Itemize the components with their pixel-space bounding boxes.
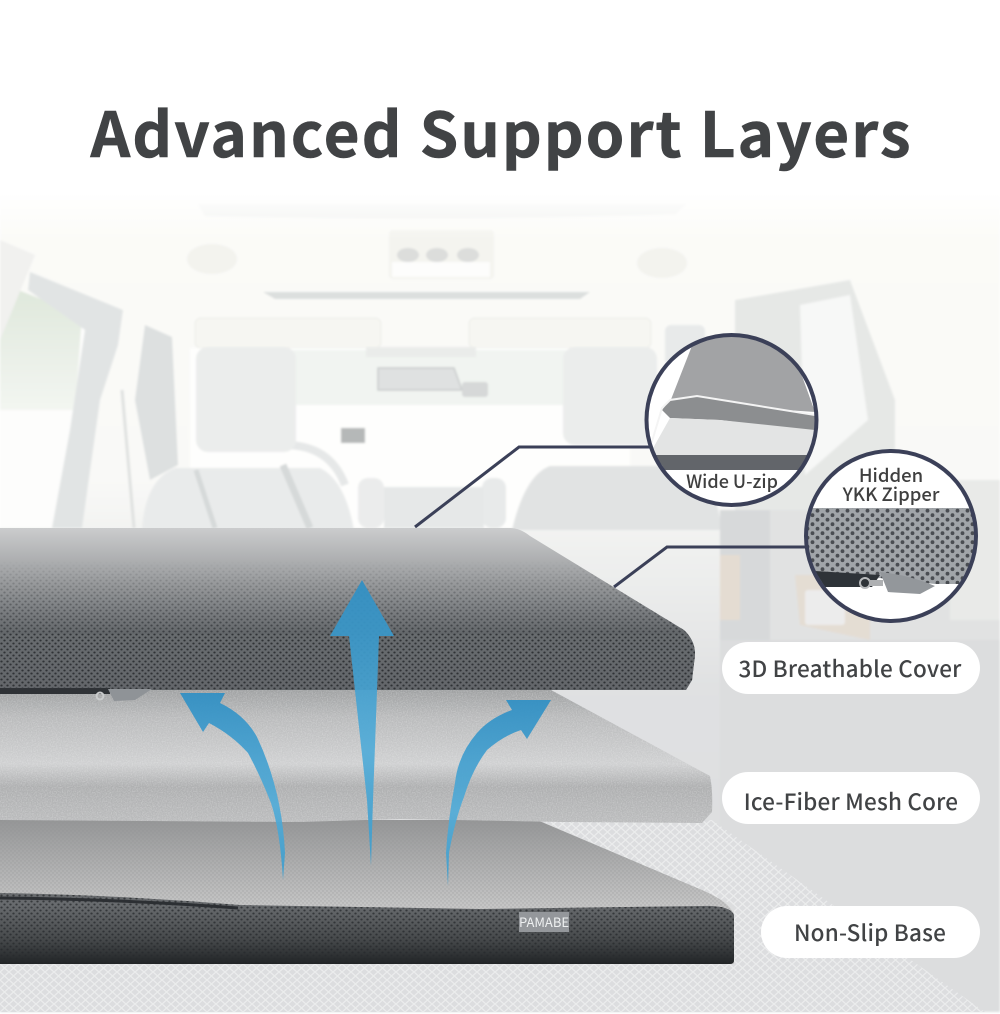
center console <box>358 478 384 528</box>
sunroof panel <box>198 204 686 219</box>
arrow: center <box>330 580 394 866</box>
right headrest <box>563 347 657 445</box>
layer: ice-fiber mesh core <box>0 690 712 823</box>
callout circle: hidden YKK zipper: Hidden <box>859 462 923 488</box>
right seat <box>512 466 722 530</box>
arrow: right <box>446 700 551 886</box>
dash phone <box>341 428 365 443</box>
seat belts <box>196 470 215 528</box>
distant trees <box>290 350 580 405</box>
callout circle: wide U-zip: Wide U-zip <box>686 468 778 494</box>
layer: non-slip base <box>0 820 734 964</box>
steering wheel <box>285 445 345 485</box>
layer: 3D breathable cover <box>0 528 695 701</box>
title: Advanced Support Layers <box>89 85 913 175</box>
left window greenery <box>0 290 82 410</box>
overhead console <box>389 230 494 279</box>
left pillar <box>0 240 35 340</box>
airflow arrows <box>180 580 551 886</box>
zipper <box>0 898 238 908</box>
label: non-slip base: Non-Slip Base <box>794 916 946 948</box>
right upper piece <box>665 325 705 365</box>
left curtain <box>135 325 178 480</box>
label: non-slip base <box>761 906 980 958</box>
left headrest <box>196 347 296 452</box>
right curtain <box>735 280 895 530</box>
left window glass <box>0 300 90 528</box>
windshield <box>190 348 630 528</box>
label: ice-fiber mesh core: Ice-Fiber Mesh Core <box>744 785 958 817</box>
brand tag: PAMABE <box>519 912 569 931</box>
label: 3D breathable cover <box>722 642 980 694</box>
rear mirror <box>366 347 488 397</box>
roof vents <box>187 244 687 278</box>
zipper with pull <box>0 688 152 701</box>
sun visors <box>195 318 651 348</box>
callout circle: hidden YKK zipper: YKK Zipper <box>842 481 940 507</box>
left belt strap <box>122 390 134 528</box>
left seat <box>142 468 354 530</box>
right lower door <box>720 510 1000 640</box>
callout circle: hidden YKK zipper <box>805 451 977 621</box>
floor <box>720 640 1000 1012</box>
callout line: wide U-zip <box>415 447 650 527</box>
callout circle: wide U-zip <box>646 333 816 505</box>
roof bar <box>263 292 590 299</box>
callout line: hidden zipper <box>614 547 808 587</box>
left window frame <box>28 272 123 528</box>
fade over top of photo <box>0 190 1000 240</box>
diamond floor mat <box>0 820 985 1012</box>
label: 3D breathable cover: 3D Breathable Cover <box>738 652 962 684</box>
label: ice-fiber mesh core <box>722 772 980 824</box>
arrow: left <box>180 693 285 880</box>
